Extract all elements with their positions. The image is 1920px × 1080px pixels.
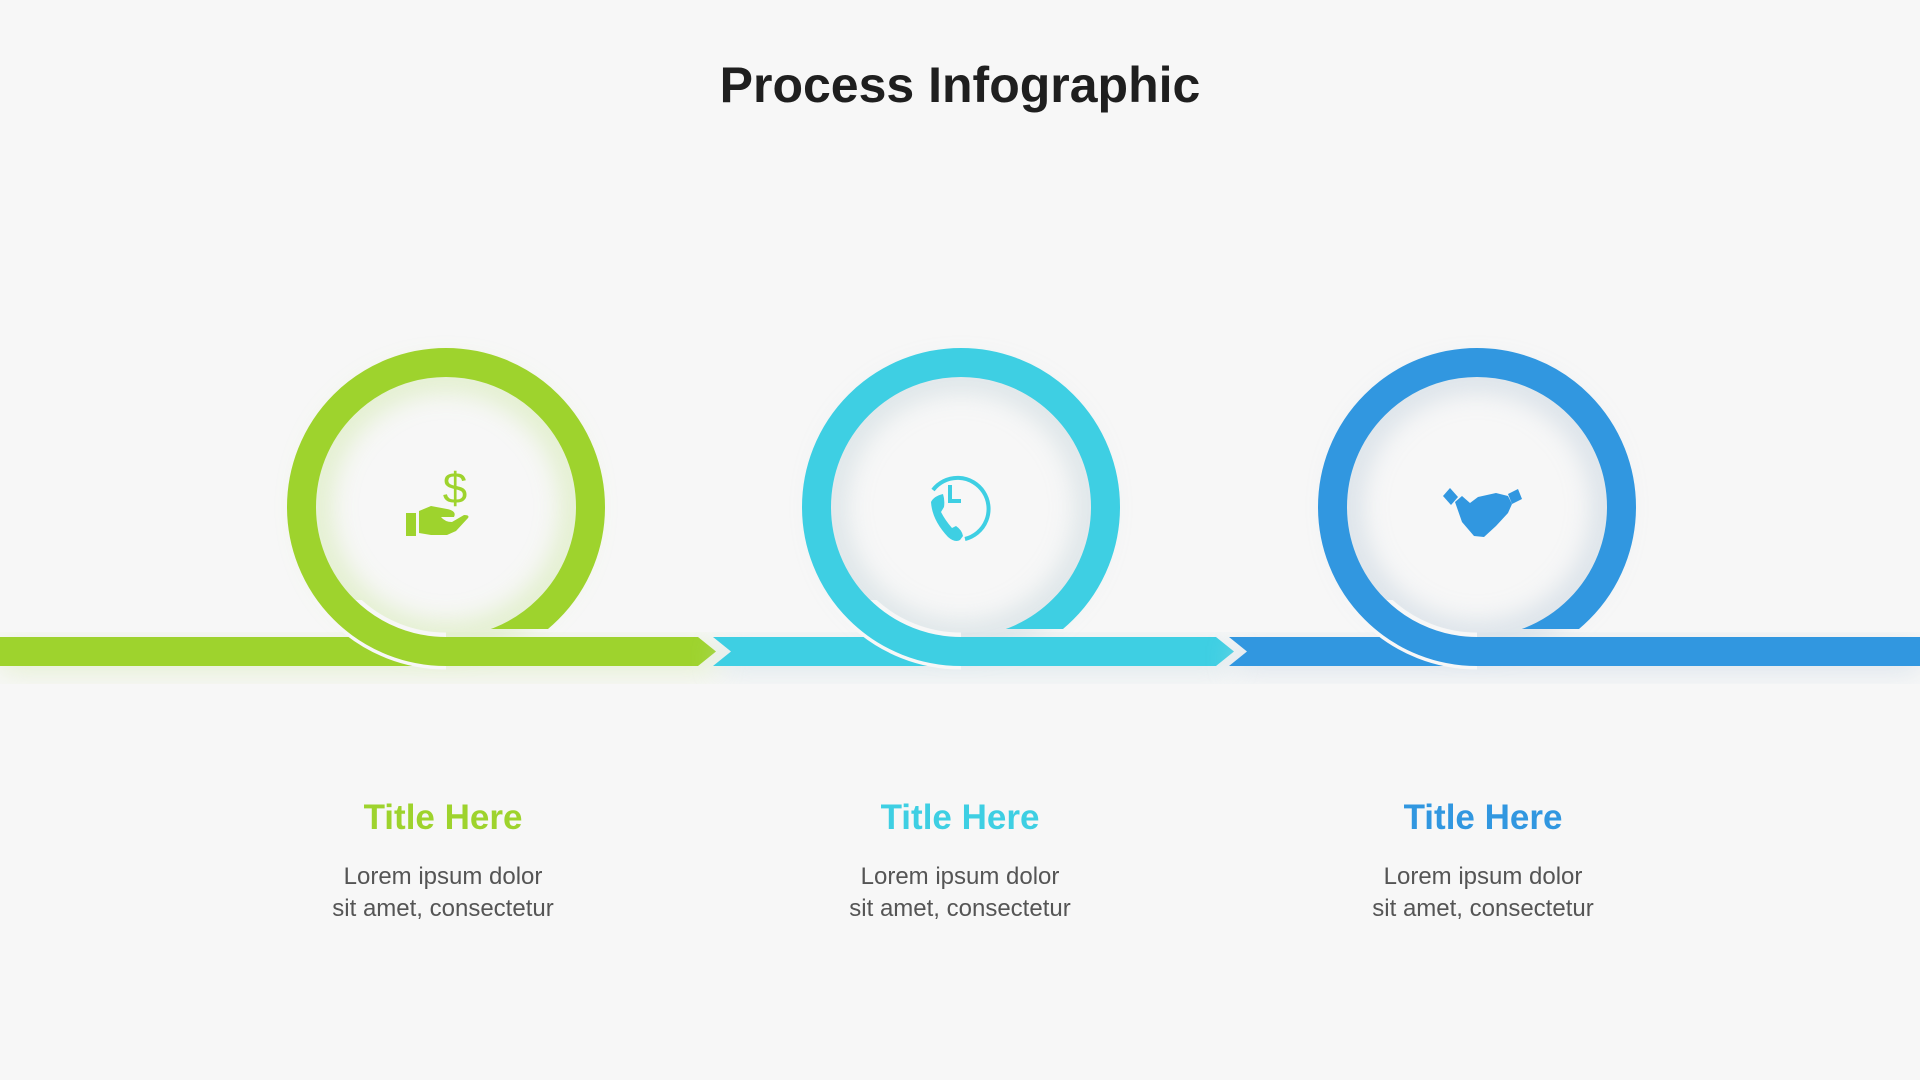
- step 1 text: sit amet, consectetur: [332, 895, 554, 922]
- step 3 text: Title Here: [1404, 798, 1562, 837]
- icon: handshake: [1443, 488, 1522, 537]
- step 2 loop: [713, 362, 1234, 671]
- icon: hand with dollar: [406, 464, 468, 536]
- icon: hand with dollar: $: [443, 464, 467, 513]
- step 3 text: sit amet, consectetur: [1372, 895, 1594, 922]
- step 2 text: sit amet, consectetur: [849, 895, 1071, 922]
- step 3 text: Lorem ipsum dolor: [1384, 863, 1582, 890]
- step 2 text: Lorem ipsum dolor: [861, 863, 1059, 890]
- step 1 text: [332, 798, 554, 922]
- step 1 loop: [0, 362, 716, 671]
- step 1 text: Title Here: [364, 798, 522, 837]
- step 3 loop: [1229, 362, 1920, 671]
- step 1 text: Lorem ipsum dolor: [344, 863, 542, 890]
- step 2 text: [849, 798, 1071, 922]
- step 3 text: [1372, 798, 1594, 922]
- icon: phone clock: [931, 478, 989, 541]
- process diagram: [0, 348, 1920, 684]
- title: Process Infographic: [720, 57, 1200, 113]
- step 2 text: Title Here: [881, 798, 1039, 837]
